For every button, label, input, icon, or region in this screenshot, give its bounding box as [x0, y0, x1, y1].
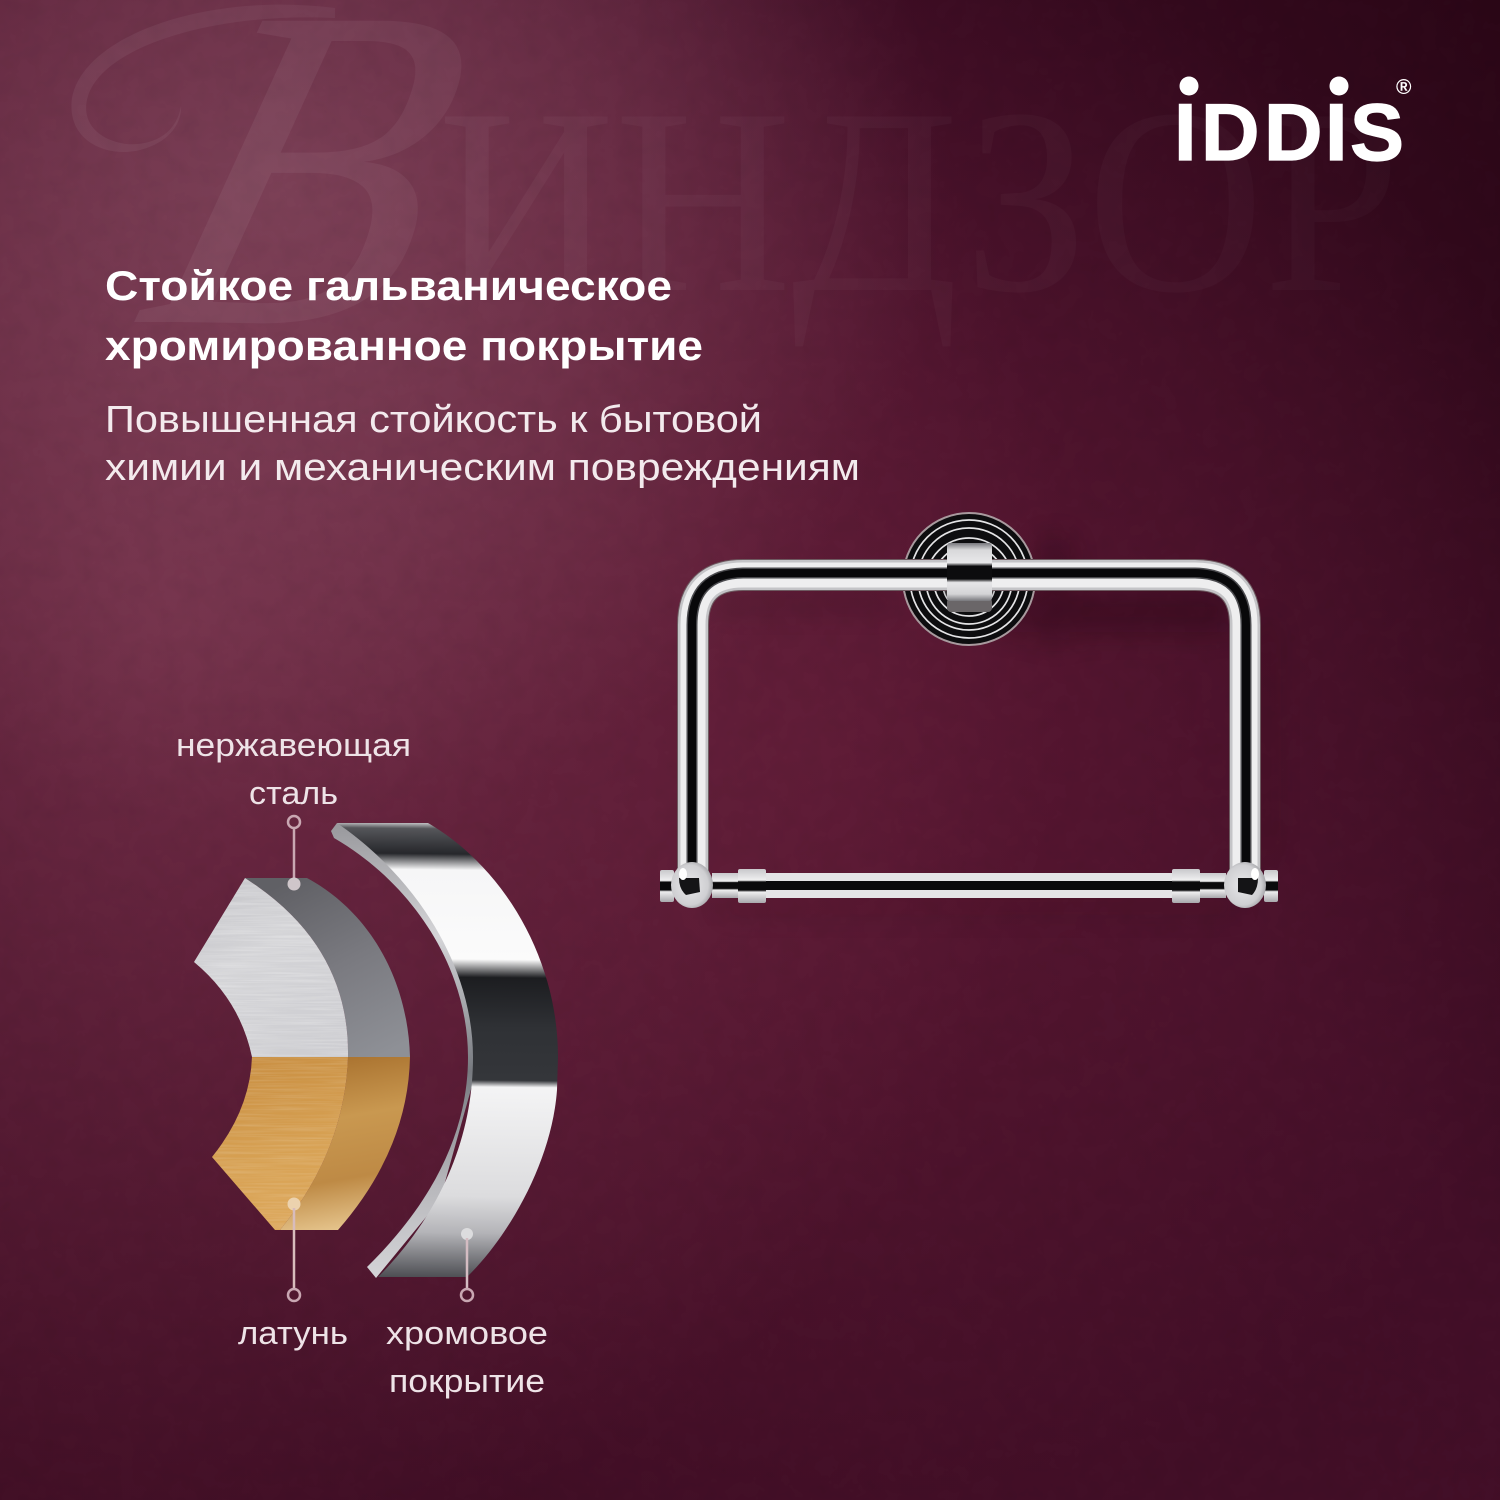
- heading: хромированное покрытие: [105, 322, 703, 369]
- wall shadow: [715, 540, 1274, 912]
- steel side face: [245, 878, 410, 1057]
- label: chrome plating: [386, 1228, 548, 1399]
- chrome face: [337, 823, 558, 1277]
- label text: хромовое: [386, 1315, 548, 1351]
- brass side face: [280, 1057, 410, 1230]
- pointer: [288, 1198, 300, 1301]
- label text: латунь: [238, 1315, 348, 1351]
- label text: нержавеющая: [176, 727, 411, 763]
- brass front face: [212, 1057, 348, 1230]
- right bar end: [1172, 862, 1278, 908]
- pointer: [288, 816, 300, 890]
- label text: [386, 1315, 548, 1399]
- logo wordmark: IDDIS: [1174, 88, 1404, 178]
- left bar end: [660, 862, 766, 908]
- pointer: [461, 1228, 473, 1301]
- subheading: [105, 399, 860, 489]
- watermark: Виндзор: [71, 0, 1400, 422]
- bottom bar: [740, 873, 1200, 898]
- label text: [176, 727, 411, 811]
- heading: Стойкое гальваническое: [105, 262, 672, 309]
- subheading: химии и механическим повреждениям: [105, 447, 860, 489]
- layer: brass: [205, 1055, 410, 1235]
- watermark word: ИНДЗОР: [438, 55, 1400, 348]
- subheading: Повышенная стойкость к бытовой: [105, 399, 762, 441]
- steel front face: [194, 878, 348, 1057]
- product: towel ring: [660, 513, 1278, 912]
- logo i-dots: [1180, 76, 1348, 96]
- label text: покрытие: [389, 1363, 545, 1399]
- layer: stainless steel: [190, 870, 410, 1060]
- centre collar: [947, 543, 992, 601]
- label text: сталь: [249, 775, 338, 811]
- registered mark: ®: [1396, 76, 1412, 99]
- logo: IDDIS: [1174, 76, 1412, 178]
- heading: [105, 262, 703, 369]
- label: brass: [238, 1198, 348, 1351]
- layer: chrome plating: [331, 823, 558, 1278]
- label: stainless steel: [176, 727, 411, 890]
- chrome edge: [331, 823, 482, 1278]
- rosette wall mount: [903, 513, 1035, 645]
- top and side tube: [692, 573, 1246, 872]
